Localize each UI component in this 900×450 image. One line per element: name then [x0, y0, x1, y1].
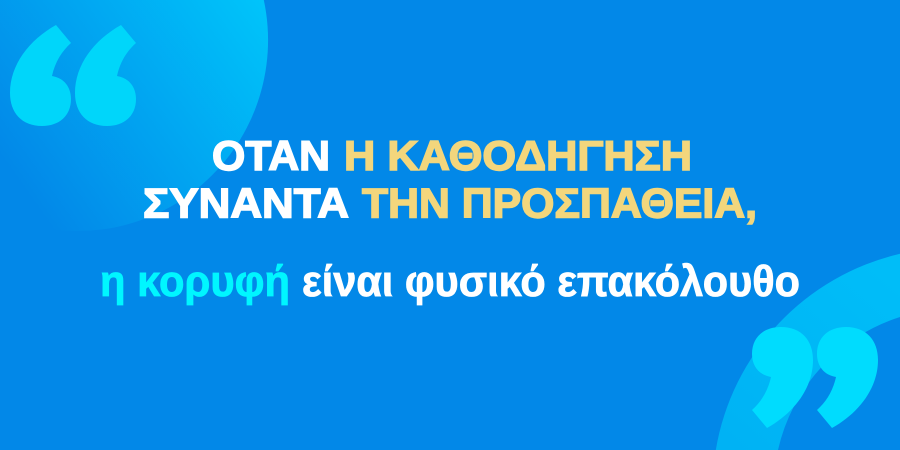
headline line 1: ΟΤΑΝ [212, 132, 330, 179]
headline line 2 [143, 180, 757, 226]
decorative circle: top left [0, 0, 268, 231]
icon: opening quotation mark [10, 25, 136, 126]
decorative ring: bottom right [716, 254, 900, 450]
headline line 1: Η ΚΑΘΟΔΗΓΗΣΗ [344, 132, 692, 179]
headline line 2: ΣΥΝΑΝΤΑ [143, 180, 349, 226]
quote text [100, 132, 800, 306]
icon: closing quotation mark [752, 327, 878, 428]
closing line [100, 257, 800, 306]
closing line: η κορυφή [100, 257, 290, 306]
closing line: είναι φυσικό επακόλουθο [302, 257, 800, 306]
headline line 2: ΤΗΝ ΠΡΟΣΠΑΘΕΙΑ, [362, 180, 757, 226]
